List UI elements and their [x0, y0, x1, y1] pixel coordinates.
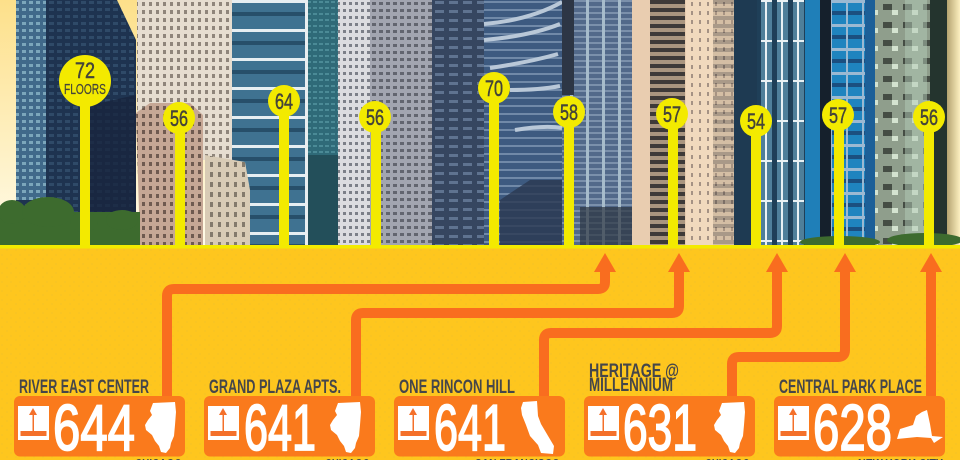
building: old green roof block [205, 155, 250, 245]
arrow: Grand Plaza Apts. [356, 253, 690, 400]
arrow: Heritage at Millennium [732, 253, 856, 400]
pin: 57 floors: 57 [829, 103, 847, 128]
pin: 72 floors [59, 55, 111, 246]
pin: 58 floors: 58 [560, 100, 578, 125]
icon: height [208, 406, 239, 440]
building: pink masonry tower [136, 103, 203, 245]
building: glass tower with white frame [232, 0, 338, 245]
pin: 56 floors [163, 102, 195, 246]
heading line two: MILLENNIUM [589, 375, 673, 396]
icon: height [398, 406, 429, 440]
pin: 70 floors [478, 72, 510, 246]
pin: 72 floors: FLOORS [64, 81, 106, 98]
heading: GRAND PLAZA APTS. [209, 377, 341, 398]
pin: 58 floors [553, 96, 585, 246]
arrow: Central Park Place [920, 253, 942, 400]
arrow: River East Center [167, 253, 616, 400]
pin: 56 floors [359, 101, 391, 246]
pin: 64 floors: 64 [275, 89, 293, 114]
card background [774, 396, 945, 456]
building: steel blue tower [562, 0, 632, 245]
building: white tower [137, 0, 232, 160]
card: Grand Plaza Apts. [204, 377, 375, 460]
card: Heritage at Millennium [584, 361, 755, 460]
icon: New York [897, 410, 943, 443]
icon: California [521, 401, 554, 454]
pin: 56 floors [913, 101, 945, 246]
card background [204, 396, 375, 456]
building: glass grid tower [734, 0, 805, 245]
heading: HERITAGE @ [589, 361, 679, 382]
trees [0, 197, 960, 248]
panel: skyline photo [0, 0, 960, 248]
pin: 56 floors: 56 [920, 105, 938, 130]
card background [584, 396, 755, 456]
arrow: One Rincon Hill [544, 253, 788, 400]
icon: Illinois [330, 402, 361, 453]
pin: 70 floors: 70 [485, 76, 503, 101]
floor pins [0, 55, 960, 248]
card: Central Park Place [774, 377, 945, 460]
pin: 54 floors [740, 105, 772, 246]
icon: height [18, 406, 49, 440]
building: white and grey tower [338, 0, 432, 245]
pin: 57 floors: 57 [663, 102, 681, 127]
icon: height [588, 406, 619, 440]
pin: 56 floors: 56 [366, 105, 384, 130]
pin: 64 floors [268, 85, 300, 246]
pin: 54 floors: 54 [747, 109, 765, 134]
building: dark glass tower [16, 0, 136, 245]
icon: Illinois [714, 402, 745, 453]
pin: 56 floors: 56 [170, 106, 188, 131]
pin: 72 floors: 72 [75, 58, 95, 83]
building: bright blue tower [805, 0, 875, 245]
building: tan balcony tower [632, 0, 734, 245]
card background [394, 396, 565, 456]
panel: yellow base [0, 245, 960, 460]
icon: height [778, 406, 809, 440]
card background [14, 396, 185, 456]
card: River East Center [14, 377, 185, 460]
pin: 57 floors [822, 99, 854, 246]
card: One Rincon Hill [394, 377, 565, 460]
heading: RIVER EAST CENTER [19, 377, 149, 398]
pin: 57 floors [656, 98, 688, 246]
building: curved blue tower [432, 0, 562, 245]
heading: ONE RINCON HILL [399, 377, 515, 398]
building: grey-green tower [875, 0, 947, 245]
icon: Illinois [145, 402, 176, 453]
